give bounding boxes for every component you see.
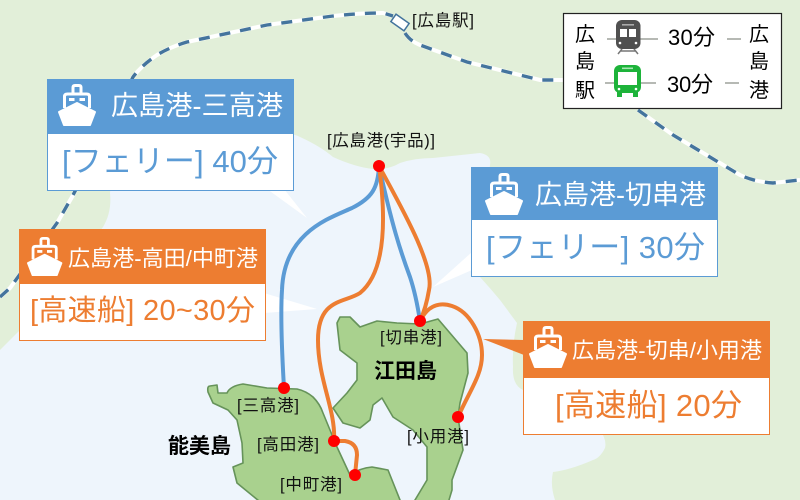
panel: 広島港-高田/中町港 [19,229,266,340]
fast boat route: 広島港-高田/中町港 [318,166,383,441]
sea [0,134,605,500]
fast boat route: 切串港-小用港 [420,304,482,417]
port labels: [切串港] [380,328,442,347]
legend: access from 広島駅 to 広島港: 広 [749,23,769,46]
legend: access from 広島駅 to 広島港: 島 [575,50,595,73]
icon: 広島駅 station [391,14,409,31]
panel: 広島港-三高港 [47,79,294,190]
port markers [278,160,464,481]
port labels: [小用港] [407,427,469,446]
icon: ship [28,238,61,275]
island: 江田島 [333,317,468,500]
ferry route: 広島港-切串港 [379,166,420,321]
port labels: [広島港(宇品)] [327,131,435,150]
icon: bus [614,65,641,97]
heading: 広島港-切串/小用港 [572,338,762,363]
legend: access from 広島駅 to 広島港: 島 [749,50,769,73]
icon: train [616,20,640,54]
island: 能美島 [208,384,404,500]
legend time: bus: 30分 [667,72,713,97]
legend: access from 広島駅 to 広島港: 広 [575,23,595,46]
legend: access from 広島駅 to 広島港 [564,14,782,108]
icon: ship [486,174,522,214]
heading: 広島港-切串港 [535,180,706,210]
port labels: [三高港] [237,396,299,415]
label: 広島駅: [広島駅] [412,11,474,30]
port labels: [中町港] [280,475,342,494]
ferry route: 広島港-三高港 [281,166,379,388]
fast boat time: [高速船] 20分 [555,388,742,423]
panel: 広島港-切串港 [471,167,718,276]
legend time: train: 30分 [668,25,715,50]
legend: access from 広島駅 to 広島港: 港 [749,79,769,102]
port labels [237,131,469,494]
ferry time: [フェリー] 40分 [62,144,278,179]
island name: 能美島: 能美島 [168,435,231,458]
port labels: [高田港] [257,435,319,454]
callout pointers [264,189,472,313]
panel: 広島港-切串/小用港 [483,321,770,434]
island name: 江田島: 江田島 [374,360,437,383]
ferry time: [フェリー] 30分 [486,230,705,265]
heading: 広島港-高田/中町港 [68,246,258,271]
icon: ship [530,328,566,367]
fast boat route: 広島港-切串港 [379,166,430,321]
icon: ship [59,86,95,125]
fast boat route: 高田港-中町港 [334,441,357,475]
legend: access from 広島駅 to 広島港: 駅 [575,80,595,102]
fast boat time: [高速船] 20~30分 [30,294,255,327]
heading: 広島港-三高港 [111,91,283,121]
railway line [0,13,800,297]
